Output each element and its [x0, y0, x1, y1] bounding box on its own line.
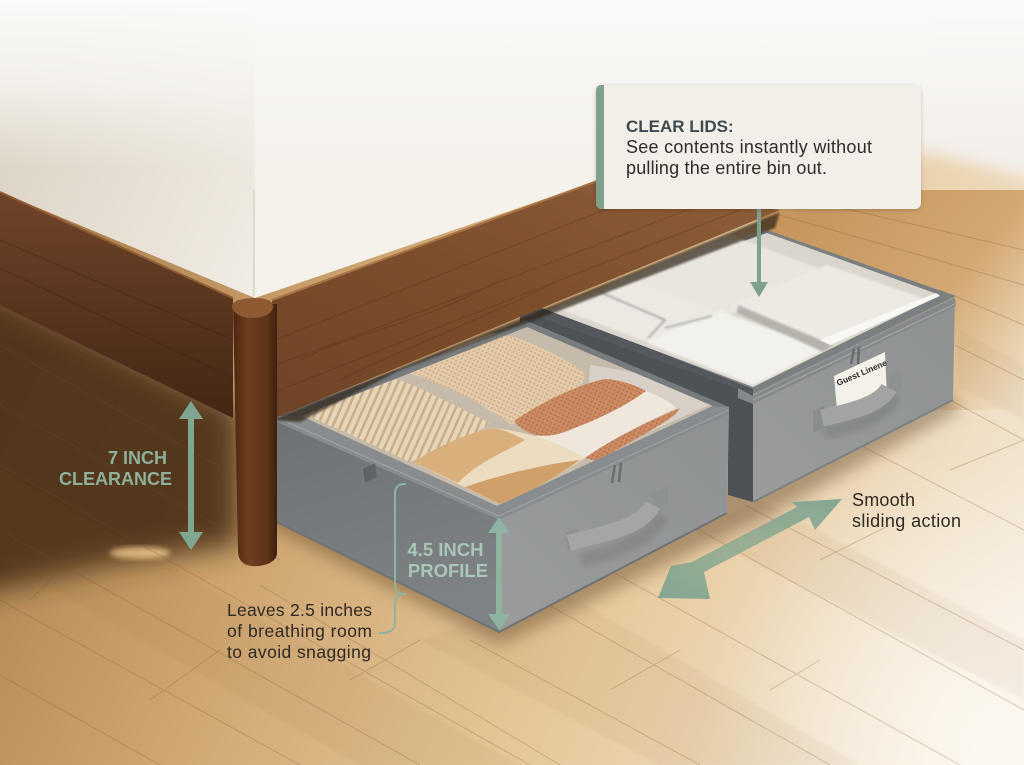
callout text: pulling the entire bin out. [626, 158, 827, 178]
bin rear rim [738, 298, 956, 404]
storage bin: guest linens (rear) [520, 230, 956, 502]
annotation: 4.5 inch profile [407, 517, 510, 630]
front face [499, 412, 729, 632]
leg cap [232, 298, 273, 318]
label card: Guest Linene [835, 357, 889, 388]
handle [813, 370, 902, 433]
rim [277, 406, 729, 520]
label: 4.5 INCH [407, 539, 483, 560]
annotation: smooth sliding [658, 490, 961, 599]
bed frame [0, 180, 780, 566]
bin rear base edge [753, 400, 953, 502]
left face [277, 418, 499, 632]
label: sliding action [852, 511, 961, 531]
note text: Leaves 2.5 inches [227, 600, 372, 620]
storage bin: sweaters (front) [277, 320, 729, 632]
callout text: See contents instantly without [626, 137, 872, 157]
double arrow [488, 517, 510, 630]
knit sweaters [308, 333, 712, 504]
note text: to avoid snagging [227, 642, 371, 662]
bin shadow on floor [265, 395, 960, 645]
callout: clear lids [596, 85, 921, 297]
zipper pulls [612, 463, 621, 483]
handle [566, 485, 668, 560]
label: Smooth [852, 490, 915, 510]
mattress [0, 0, 930, 298]
lid and interior [277, 320, 729, 513]
top fade [0, 0, 1024, 170]
bracket [379, 484, 406, 633]
note text: of breathing room [227, 621, 372, 641]
label card [834, 352, 889, 410]
folded linens [560, 237, 922, 383]
label: PROFILE [408, 560, 488, 581]
double arrow [179, 401, 203, 550]
callout text: CLEAR LIDS: [626, 117, 734, 136]
leg [233, 304, 277, 566]
label: CLEARANCE [59, 469, 172, 489]
left side rail [0, 192, 233, 418]
base edge [277, 513, 727, 632]
bin rear lid [540, 230, 956, 394]
background behind bed [600, 0, 1024, 205]
zipper pulls [851, 347, 859, 364]
callout panel [596, 85, 921, 209]
bin rear front face [753, 297, 955, 502]
shadow under front rail [272, 212, 780, 422]
double arrow [658, 499, 842, 599]
annotation: breathing room [227, 484, 406, 662]
label: 7 INCH [108, 448, 167, 468]
annotation: 7 inch clearance [59, 401, 203, 550]
front side rail [272, 180, 780, 418]
callout accent bar [596, 85, 604, 209]
bin rear left side [520, 300, 753, 502]
side tab [363, 463, 377, 483]
lid glare [820, 293, 940, 345]
callout arrow [750, 205, 768, 297]
